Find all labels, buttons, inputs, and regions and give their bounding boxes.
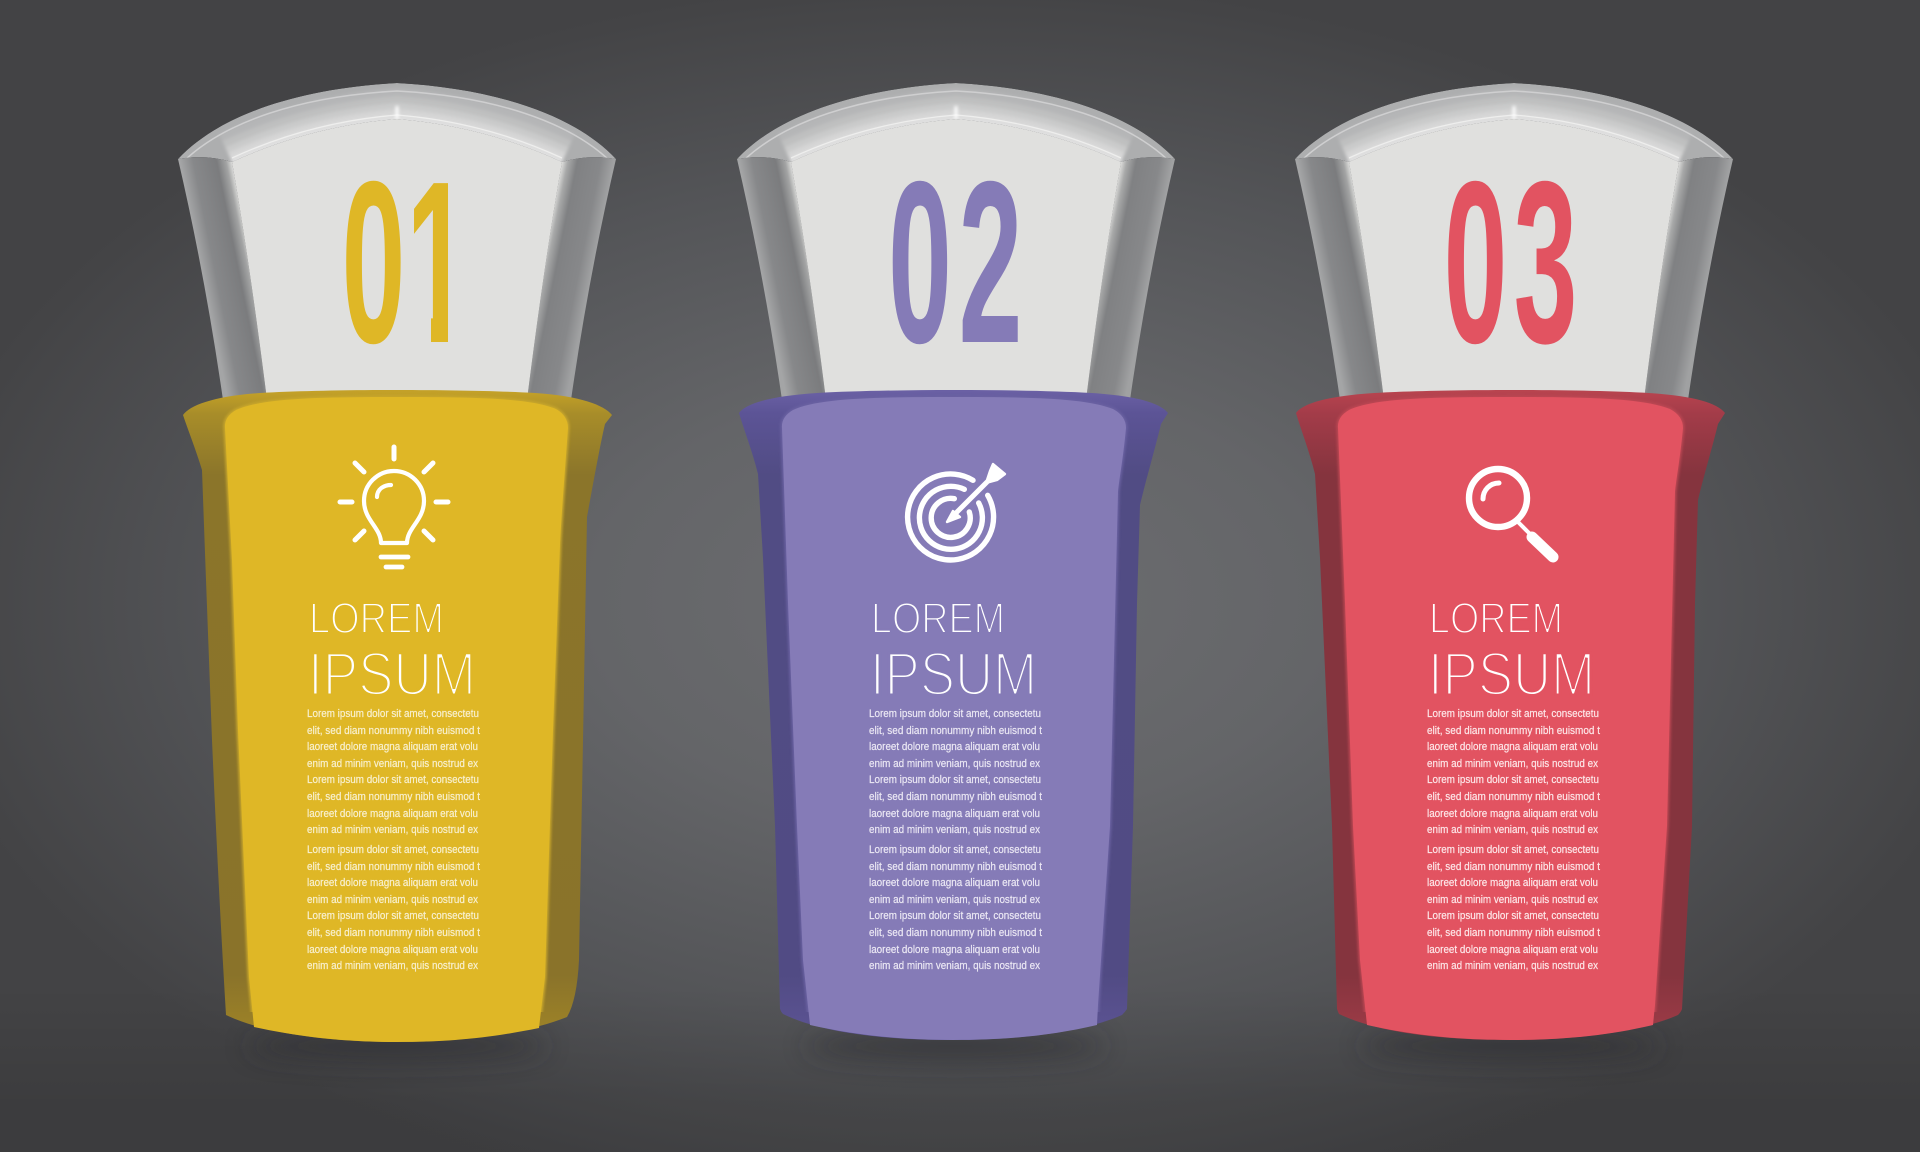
body text: enim ad minim veniam, quis nostrud ex	[869, 960, 1040, 972]
body text: enim ad minim veniam, quis nostrud ex	[869, 894, 1040, 906]
heading: LOREM IPSUM: LOREM	[1429, 595, 1563, 643]
icon: light bulb	[340, 447, 448, 567]
body text: elit, sed diam nonummy nibh euismod t	[869, 791, 1042, 803]
body text: Lorem ipsum dolor sit amet, consectetu	[1427, 910, 1599, 922]
body text: enim ad minim veniam, quis nostrud ex	[1427, 960, 1598, 972]
body text: laoreet dolore magna aliquam erat volu	[1427, 944, 1598, 956]
number 03	[1444, 133, 1577, 391]
heading: LOREM IPSUM: IPSUM	[870, 640, 1037, 708]
body text: elit, sed diam nonummy nibh euismod t	[1427, 861, 1600, 873]
silver cap	[1295, 83, 1733, 400]
body text: enim ad minim veniam, quis nostrud ex	[869, 758, 1040, 770]
body text: Lorem ipsum dolor sit amet, consectetu	[869, 910, 1041, 922]
number 02: 2	[959, 133, 1022, 391]
body text	[869, 708, 1042, 972]
body text: Lorem ipsum dolor sit amet, consectetu	[869, 774, 1041, 786]
heading: LOREM IPSUM	[870, 595, 1037, 708]
heading: LOREM IPSUM: LOREM	[309, 595, 444, 643]
body text: elit, sed diam nonummy nibh euismod t	[307, 725, 480, 737]
number 03: 0	[1444, 133, 1507, 391]
number 01	[346, 180, 448, 344]
body text: elit, sed diam nonummy nibh euismod t	[869, 861, 1042, 873]
body text: laoreet dolore magna aliquam erat volu	[307, 877, 478, 889]
body text: Lorem ipsum dolor sit amet, consectetu	[869, 844, 1041, 856]
body text: elit, sed diam nonummy nibh euismod t	[1427, 791, 1600, 803]
body text: Lorem ipsum dolor sit amet, consectetu	[1427, 774, 1599, 786]
body text: enim ad minim veniam, quis nostrud ex	[307, 960, 478, 972]
number 01: 0	[342, 133, 405, 391]
heading: LOREM IPSUM	[308, 595, 476, 708]
body text: laoreet dolore magna aliquam erat volu	[307, 944, 478, 956]
body text: laoreet dolore magna aliquam erat volu	[869, 808, 1040, 820]
icon: magnifying glass	[1469, 469, 1553, 557]
body text: Lorem ipsum dolor sit amet, consectetu	[869, 708, 1041, 720]
body outer shell	[183, 390, 612, 1042]
body text: enim ad minim veniam, quis nostrud ex	[307, 824, 478, 836]
silver cap	[737, 83, 1175, 400]
number 02	[888, 133, 1022, 391]
card shadow	[805, 1032, 1105, 1060]
body text: elit, sed diam nonummy nibh euismod t	[1427, 927, 1600, 939]
number 02: 0	[888, 133, 952, 391]
body text: elit, sed diam nonummy nibh euismod t	[307, 861, 480, 873]
body text: elit, sed diam nonummy nibh euismod t	[869, 725, 1042, 737]
body text: Lorem ipsum dolor sit amet, consectetu	[307, 708, 479, 720]
body text: elit, sed diam nonummy nibh euismod t	[307, 791, 480, 803]
body text: laoreet dolore magna aliquam erat volu	[869, 741, 1040, 753]
body text: Lorem ipsum dolor sit amet, consectetu	[307, 774, 479, 786]
body front face	[782, 397, 1126, 1040]
body outer shell	[739, 390, 1168, 1040]
body text: laoreet dolore magna aliquam erat volu	[869, 944, 1040, 956]
panel: card 03 red	[1295, 83, 1733, 1060]
body text: Lorem ipsum dolor sit amet, consectetu	[1427, 844, 1599, 856]
body outer shell	[1296, 390, 1725, 1040]
body text: laoreet dolore magna aliquam erat volu	[869, 877, 1040, 889]
body text: elit, sed diam nonummy nibh euismod t	[1427, 725, 1600, 737]
body text: laoreet dolore magna aliquam erat volu	[1427, 808, 1598, 820]
body text: laoreet dolore magna aliquam erat volu	[307, 741, 478, 753]
body text: enim ad minim veniam, quis nostrud ex	[1427, 824, 1598, 836]
heading: LOREM IPSUM: IPSUM	[1428, 640, 1595, 708]
body text: enim ad minim veniam, quis nostrud ex	[307, 758, 478, 770]
body text: laoreet dolore magna aliquam erat volu	[307, 808, 478, 820]
heading: LOREM IPSUM: IPSUM	[308, 640, 476, 708]
number 03: 3	[1514, 133, 1577, 391]
body text: Lorem ipsum dolor sit amet, consectetu	[307, 910, 479, 922]
body text: Lorem ipsum dolor sit amet, consectetu	[1427, 708, 1599, 720]
number 01: 1	[406, 133, 470, 391]
panel: card 01 yellow	[178, 83, 616, 1060]
body text: enim ad minim veniam, quis nostrud ex	[869, 824, 1040, 836]
body text: Lorem ipsum dolor sit amet, consectetu	[307, 844, 479, 856]
body text: elit, sed diam nonummy nibh euismod t	[307, 927, 480, 939]
heading: LOREM IPSUM: LOREM	[871, 595, 1005, 643]
body text: laoreet dolore magna aliquam erat volu	[1427, 741, 1598, 753]
body text: elit, sed diam nonummy nibh euismod t	[869, 927, 1042, 939]
heading: LOREM IPSUM	[1428, 595, 1595, 708]
body front face	[225, 397, 568, 1042]
icon: target with dart	[908, 464, 1005, 560]
card shadow	[247, 1032, 547, 1060]
panel: card 02 purple	[737, 83, 1175, 1060]
body front face	[1338, 397, 1683, 1040]
body text: enim ad minim veniam, quis nostrud ex	[1427, 894, 1598, 906]
silver cap	[178, 83, 616, 400]
body text: laoreet dolore magna aliquam erat volu	[1427, 877, 1598, 889]
body text: enim ad minim veniam, quis nostrud ex	[1427, 758, 1598, 770]
body text	[1427, 708, 1600, 972]
card shadow	[1361, 1032, 1661, 1060]
body text: enim ad minim veniam, quis nostrud ex	[307, 894, 478, 906]
body text	[307, 708, 480, 972]
